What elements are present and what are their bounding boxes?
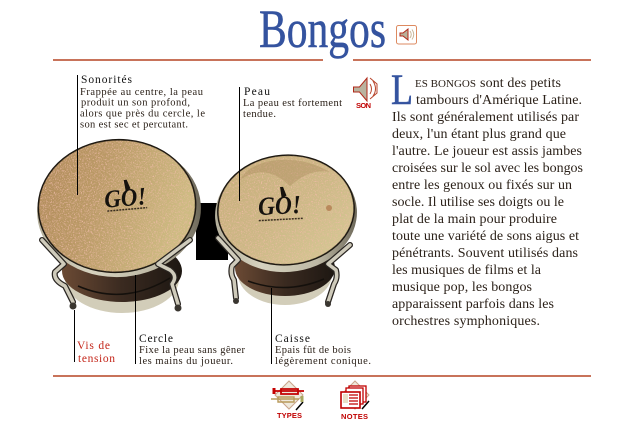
intro paragraph: sont des petits — [480, 76, 561, 91]
intro paragraph: orchestres symphoniques. — [392, 314, 540, 329]
intro paragraph: Ils sont généralement utilisés par — [392, 110, 579, 125]
label: Caisse — [271, 288, 371, 367]
large drum — [33, 134, 205, 313]
icon: types: TYPES — [277, 411, 302, 420]
intro paragraph: deux, l'un étant plus grand que — [392, 127, 566, 142]
icon: notes — [341, 381, 369, 421]
intro paragraph: musique pop, les bongos — [392, 280, 532, 295]
illustration: bongos — [33, 134, 361, 313]
intro paragraph: apparaissent parfois dans les — [392, 297, 554, 312]
intro paragraph: plat de la main pour produire — [392, 212, 557, 227]
label: Sonorités: produit un son profond, — [81, 98, 190, 108]
label: Peau: tendue. — [243, 109, 276, 120]
label: Peau — [239, 86, 342, 201]
tension screws — [42, 240, 73, 302]
label: Sonorités: alors que près du cercle, le — [80, 108, 205, 120]
intro paragraph: les musiques de films et la — [392, 263, 542, 278]
label: Caisse: Epais fût de bois — [275, 345, 351, 356]
intro paragraph: socle. Il utilise ses doigts ou le — [392, 195, 564, 210]
tension screws — [218, 238, 238, 298]
label: Peau: Peau — [244, 86, 270, 98]
large drum logo: GO! — [103, 183, 147, 214]
icon: son speaker — [354, 78, 377, 110]
icon: son speaker: SON — [356, 101, 371, 110]
intro paragraph: l'autre. Le joueur est assis jambes — [392, 144, 582, 159]
label: Cercle: les mains du joueur. — [139, 356, 233, 367]
label: Caisse: Caisse — [275, 333, 310, 345]
icon: types — [271, 381, 304, 420]
icon: title sound button — [396, 26, 416, 44]
intro paragraph: toute une variété de sons aigus et — [392, 229, 579, 244]
intro paragraph: pénétrants. Souvent utilisés dans — [392, 246, 578, 261]
intro paragraph: tambours d'Amérique Latine. — [416, 93, 582, 108]
label: Vis de tension: tension — [78, 353, 115, 365]
label: Sonorités: Sonorités — [81, 74, 133, 86]
intro paragraph: entre les genoux ou fixés sur un — [392, 178, 572, 193]
title: Bongos — [259, 0, 386, 59]
label: Cercle — [135, 275, 246, 367]
intro paragraph: croisées sur le sol avec les bongos — [392, 161, 583, 176]
label: Sonorités: Frappée au centre, la peau — [80, 87, 204, 98]
label: Vis de tension: Vis de — [77, 340, 110, 352]
top rule — [53, 59, 591, 61]
label: Cercle: Fixe la peau sans gêner — [139, 345, 246, 356]
small drum — [211, 150, 361, 307]
connecting bar — [196, 203, 228, 260]
intro paragraph — [391, 67, 583, 329]
label: Sonorités — [77, 74, 205, 195]
bottom rule — [53, 375, 591, 377]
label: Cercle: Cercle — [139, 333, 173, 345]
label: Caisse: légèrement conique. — [275, 356, 371, 367]
icon: notes: NOTES — [341, 412, 368, 421]
small drum logo: GO! — [257, 190, 302, 221]
intro paragraph: ES BONGOS — [415, 78, 476, 90]
drop cap: L — [391, 67, 413, 114]
label: Peau: La peau est fortement — [243, 98, 342, 109]
label: Vis de tension — [74, 310, 115, 365]
label: Sonorités: son est sec et percutant. — [80, 120, 188, 130]
